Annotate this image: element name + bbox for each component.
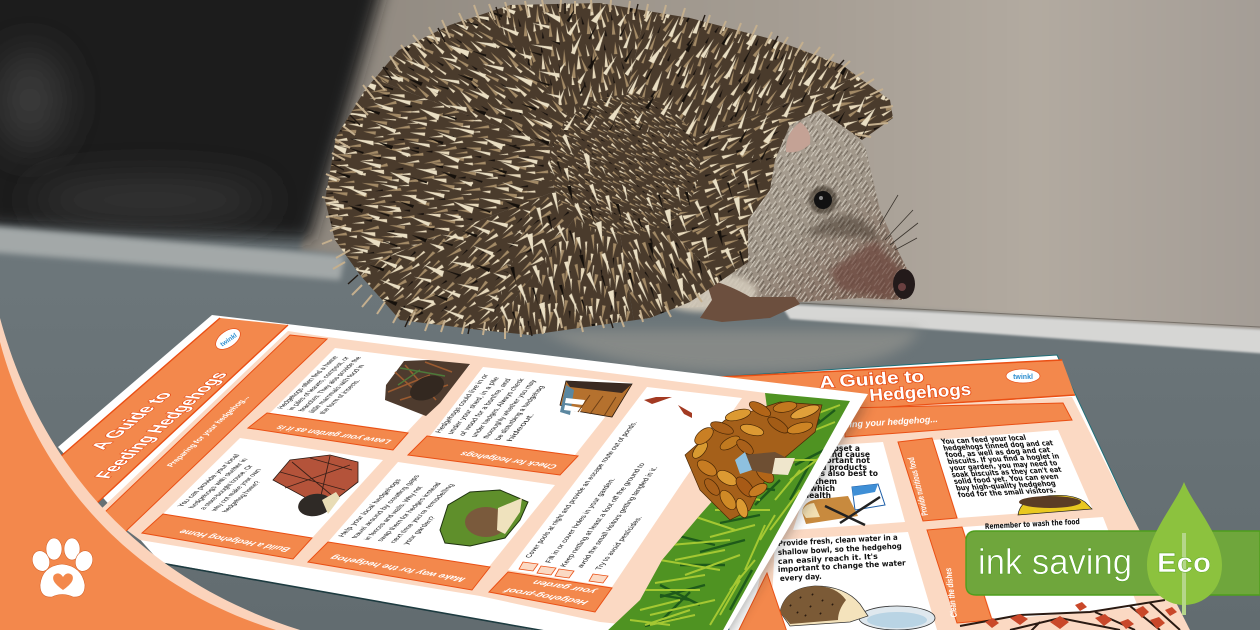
- label: Hedgehog-proof: [501, 586, 590, 606]
- box: check for hedgehogs: hideout.: [504, 413, 536, 442]
- box: check for hedgehogs: [408, 367, 632, 475]
- icon: wooden shed: [560, 381, 632, 417]
- box: hedgehog-proof your garden: Cover pools at night and provide an escape route out of ponds.: [523, 421, 639, 558]
- logo: [212, 324, 244, 354]
- label: [408, 436, 578, 475]
- box: avoid bread and milk: It's important not: [794, 456, 870, 465]
- logo: twinkl: [219, 332, 239, 348]
- box: check for hedgehogs: under your shed, in a pile: [445, 377, 501, 435]
- title: A Guide to: [86, 391, 178, 451]
- banner bar: [966, 531, 1260, 595]
- shadow of first worksheet: [610, 396, 868, 630]
- hedgehog spines body: [325, 3, 893, 335]
- box: leave your garden as it is: in piles of leaves, compost, or: [286, 356, 352, 411]
- box: clean the dishes: Clean the dishes: [943, 567, 959, 618]
- box: build a hedgehog home: You can provide your local: [175, 454, 242, 507]
- box: avoid bread and milk: health: [804, 491, 831, 500]
- label: Build a Hedgehog Home: [176, 528, 292, 553]
- icon: brick pile with hedgehog: [273, 455, 358, 519]
- box: hedgehog-proof your garden: Try to avoid pesticides.: [593, 516, 644, 570]
- box: hedgehog-proof your garden: avoid the small visitors getting tangled in it.: [575, 466, 660, 568]
- box: make way for the hedgehog: next time you're remodelling: [388, 484, 456, 543]
- header band: Hedgehogs: [869, 380, 972, 405]
- label: [489, 572, 612, 612]
- box: build a hedgehog home: why not make your own: [208, 469, 263, 512]
- page: [700, 355, 1190, 630]
- box: make way for the hedgehog: travel around by creating gaps: [349, 475, 422, 539]
- hedgehog nose: [893, 269, 915, 299]
- background: ledge at left: [0, 226, 345, 280]
- box: water: can easily reach it. It's: [778, 552, 878, 566]
- hedgehog whiskers: [880, 195, 918, 250]
- box: avoid bread and milk: [782, 442, 905, 530]
- box: provide nutritious food: biscuits. If you find a hoglet in: [946, 452, 1060, 466]
- hedgehog foot: [700, 278, 800, 322]
- box: check for hedgehogs: Hedgehogs could live in or: [433, 373, 491, 433]
- peach panel: [745, 397, 1195, 630]
- icon: falling leaves: [644, 397, 692, 418]
- subheading band: Feeding your hedgehog...: [828, 414, 938, 431]
- box: water: Provide fresh, clean water in a: [778, 533, 898, 548]
- box: clean the dishes: [927, 517, 1138, 623]
- box: check for hedgehogs: be disturbing a hedgehog: [492, 385, 546, 440]
- box: avoid bread and milk: stomach and cause: [788, 450, 870, 459]
- header band: Feeding Hedgehogs: [91, 371, 233, 480]
- box: provide nutritious food: hedgehogs tinned dog and cat: [942, 438, 1054, 453]
- box: avoid bread and milk: like it. It's also best to: [782, 469, 878, 478]
- box: avoid bread and milk: avoid them: [789, 477, 837, 486]
- hedgehog in leaf pile: [735, 452, 795, 475]
- label: your garden: [529, 579, 600, 596]
- box: build a hedgehog home: a store-bought house. Or: [197, 464, 255, 510]
- header band: [60, 318, 288, 503]
- illustration: autumn branches: [960, 600, 1180, 630]
- box: provide nutritious food: food for the small visitors.: [957, 486, 1057, 499]
- box: provide nutritious food: soak biscuits as they can't eat: [950, 465, 1063, 479]
- eco label: Eco: [1157, 547, 1211, 578]
- box: leave your garden as it is: Hedgehogs often find a home: [275, 356, 340, 409]
- box: provide nutritious food: solid food yet. You can even: [952, 472, 1060, 486]
- orange corner shape: [0, 318, 300, 630]
- box: water: shallow bowl, so the hedgehog: [778, 542, 902, 557]
- eco banner: [966, 482, 1260, 615]
- box: make way for the hedgehog: your garden?: [400, 516, 438, 545]
- box: leave your garden as it is: [248, 348, 470, 450]
- page: [58, 315, 868, 630]
- leaf pile: [685, 399, 822, 520]
- logo: twinkl: [1013, 374, 1033, 381]
- ink saving label: ink saving: [978, 541, 1132, 582]
- label: [142, 514, 312, 559]
- box: make way for the hedgehog: Help your local hedgehogs: [336, 479, 403, 537]
- peach panel: [100, 331, 838, 630]
- box: build a hedgehog home: hedgehog home?: [220, 481, 263, 513]
- label: [248, 413, 408, 450]
- box: build a hedgehog home: hedgehogs with shelter in: [186, 458, 250, 509]
- box: leave your garden as it is: branches. They also provide the: [296, 356, 363, 412]
- box: leave your garden as it is: little mammals with food in: [307, 364, 367, 413]
- box: avoid bread and milk: Milk can upset a: [790, 444, 860, 453]
- background: blurred taupe wall: [300, 0, 1260, 334]
- box: leave your garden as it is: the form of insects.: [317, 379, 362, 414]
- page lower edge shadow: [160, 563, 590, 630]
- icon: green hedge with hedgehog: [440, 490, 528, 546]
- box: water: important to change the water: [778, 558, 906, 574]
- label: Leave your garden as it is: [273, 424, 393, 445]
- box: avoid bread and milk: to feed products: [796, 463, 867, 472]
- subheading band: [105, 335, 327, 532]
- box: provide nutritious food: your garden, you may need to: [948, 459, 1058, 473]
- second worksheet: feeding your hedgehog: [700, 355, 1195, 630]
- icon: food dish: [1018, 495, 1092, 515]
- box: provide nutritious food: [898, 430, 1092, 521]
- background: dark blurred room at left: [0, 0, 385, 240]
- icon: hedgehog and water bowl: [780, 586, 935, 630]
- photo: hedgehog: [300, 0, 918, 360]
- illustration: grass and leaf pile: [600, 390, 860, 630]
- hedgehog edge spines: [322, 0, 893, 339]
- logo: [1006, 369, 1040, 383]
- box: hedgehog-proof your garden: Keep netting at least a foot off the ground to: [558, 463, 647, 567]
- hedgehog eye: [809, 186, 837, 214]
- grass: [600, 390, 860, 630]
- box: clean the dishes: Remember to wash the food: [985, 517, 1080, 531]
- box: check for hedgehogs: under hedges. Always check: [469, 378, 526, 438]
- box: avoid bread and milk: bread which: [783, 484, 835, 493]
- hedgehog reflection on table: [540, 330, 920, 372]
- box: provide nutritious food: You can feed your local: [939, 433, 1027, 446]
- box: water: every day.: [780, 572, 822, 583]
- box: provide nutritious food: Provide nutritious food: [906, 456, 930, 517]
- box: build a hedgehog home: [142, 438, 383, 559]
- hedgehog head and fur: [640, 105, 915, 312]
- strip at lower left: [738, 573, 787, 630]
- box: check for hedgehogs: of wood for a bonfire, and: [457, 378, 513, 436]
- box: provide nutritious food: buy high-quality hedgehog: [955, 479, 1057, 492]
- box: make way for the hedgehog: [308, 462, 555, 590]
- box: hedgehog-proof your garden: Fill in or cover holes in your garden.: [543, 478, 617, 563]
- label: Make way for the hedgehog: [327, 554, 467, 583]
- header band: [700, 360, 1075, 417]
- label: [308, 542, 490, 590]
- label: Check for hedgehogs: [457, 450, 559, 470]
- icon: leaf and twig nest: [385, 360, 470, 416]
- checkboxes: [519, 562, 608, 583]
- box: make way for the hedgehog: swap them for hedges instead: [375, 482, 443, 542]
- icon: paw with heart: [29, 538, 96, 597]
- icon: green drop: [1147, 482, 1222, 615]
- box: check for hedgehogs: thoroughly whether you may: [481, 379, 538, 439]
- first worksheet: preparing for your hedgehog: [58, 315, 868, 630]
- subheading band: Preparing for your hedgehog...: [164, 396, 252, 467]
- background: ledge at right: [780, 302, 1260, 354]
- hedgehog ear: [786, 122, 810, 152]
- box: make way for the hedgehog: in fences and walls. Why not: [362, 486, 425, 540]
- box: hedgehog-proof your garden: [489, 387, 742, 612]
- box: water: [770, 532, 940, 630]
- box: provide nutritious food: food, as well as dog and cat: [944, 445, 1052, 459]
- icon: bread and milk crossed out: [802, 484, 885, 525]
- header band: A Guide to: [819, 367, 925, 392]
- subheading band: [828, 403, 1072, 437]
